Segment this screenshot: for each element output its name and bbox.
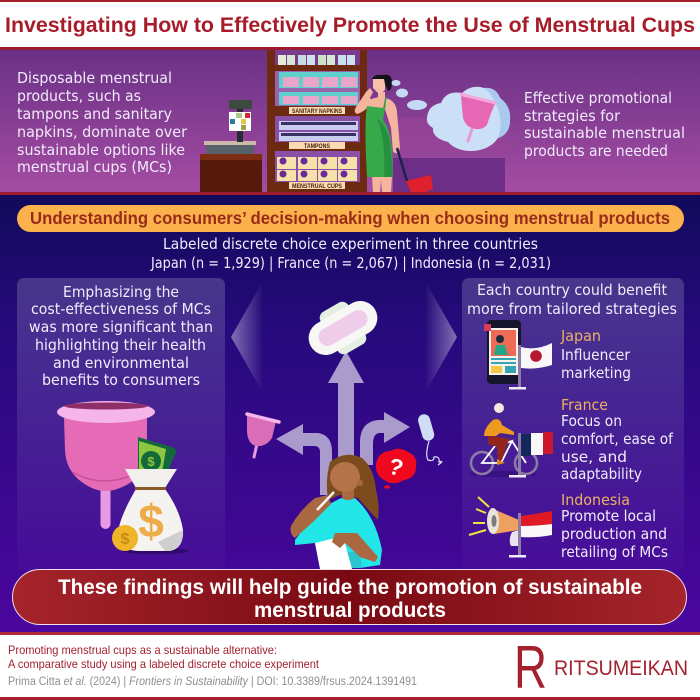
icon: money bag: $ [121,531,130,548]
text: France: comfort, ease of [561,430,674,448]
text: Indonesia [561,491,668,561]
text: Japan: marketing [561,364,631,382]
chart: decision arrows [276,351,410,495]
text: Japan [560,327,631,382]
text: experiment description: Labeled discrete choice experiment in three countries [163,235,538,253]
text: disposable products: sustainable options like [17,141,185,159]
logo: Ritsumeikan: RITSUMEIKAN [554,657,688,680]
text: tailored strategies [467,281,677,318]
arrow: right to tampon [360,412,410,465]
text: disposable products: napkins, dominate over [17,123,188,141]
citation text: A comparative study using a labeled discrete choice experiment [8,657,320,671]
text: cost-effectiveness: highlighting their health [35,336,206,354]
text: experiment description: Japan (n = 1,929) | France (n = 2,067) | Indonesia (n = 2,031) [150,254,551,272]
banner: decision making heading: Understanding consumers’ decision-making when choosing menstrual products [30,208,670,228]
icon: money bag: $ [138,495,164,547]
text: Indonesia: retailing of MCs [561,543,668,561]
citation text [8,643,417,688]
arrow: up to pad [328,351,364,465]
icon: store shelf [267,50,367,192]
text: tailored strategies: more from tailored strategies [467,300,677,318]
callout: conclusion: These findings will help guide the promotion of sustainable [58,576,642,599]
text: cost-effectiveness: benefits to consumers [42,371,200,389]
title bar [0,0,700,50]
icon: large menstrual cup [57,401,155,529]
text: experiment description [150,235,551,272]
text: cost-effectiveness: cost-effectiveness of MCs [31,300,211,318]
text: Japan: Influencer [561,346,631,364]
text: strategies needed: Effective promotional [524,89,672,107]
logo: Ritsumeikan: R [514,634,547,700]
text: disposable products [17,69,188,176]
citation text: Prima Citta et al. (2024) | Frontiers in Sustainability | DOI: 10.3389/frsus.2024.1391491 [8,676,417,688]
title: Investigating How to Effectively Promote the Use of Menstrual Cups [5,14,695,37]
text: France [561,396,674,483]
text: Indonesia: Promote local [561,507,656,525]
text: disposable products: Disposable menstrual [17,69,172,87]
callout: conclusion: menstrual products [254,599,446,622]
text: disposable products: menstrual cups (MCs) [17,158,172,176]
icon: woman shopper [355,75,400,192]
icon: money bag [112,437,188,554]
icon: question bubble [376,449,416,489]
panel: store scene [0,50,700,195]
icon: phone with Japan flag [484,320,552,390]
text: strategies needed: products are needed [524,142,668,160]
icon: megaphone with Indonesia flag [469,497,552,558]
icon: cyclist with France flag [469,403,553,478]
icon: shopping basket [397,148,433,192]
arrow: left to cup [276,424,332,495]
text: Japan: Japan [560,327,601,345]
citation text: Promoting menstrual cups as a sustainable alternative: [8,643,277,657]
text: cost-effectiveness: and environmental [53,354,189,372]
icon: cash register counter [200,100,262,192]
text: tailored strategies: Each country could benefit [477,281,667,299]
text: France: France [561,396,608,414]
icon: small menstrual cup [247,414,279,457]
shelf: sanitary napkins: SANITARY NAPKINS [292,109,342,115]
panel: main dark background [0,195,700,632]
shelf: menstrual cups [275,151,360,190]
decorative arrow: left chevron [231,281,263,393]
text: France: adaptability [561,465,642,483]
store background wall and counter [393,118,505,192]
text: cost-effectiveness [29,283,213,389]
shelf: sanitary napkins [275,71,360,115]
shelf: tampons: TAMPONS [304,144,330,150]
text: Indonesia: Indonesia [561,491,630,509]
icon: money bag: $ [147,454,155,469]
shelf: tampons [275,116,360,150]
icon: question bubble: ? [386,453,406,481]
text: disposable products: products, such as [17,87,141,105]
icon: tampon [417,413,442,465]
panel: right finding [462,278,684,570]
text: strategies needed: sustainable menstrual [524,124,685,142]
text: Indonesia: production and [561,525,667,543]
panel: left finding [17,278,225,570]
text: strategies needed [524,89,685,160]
text: cost-effectiveness: Emphasizing the [63,283,179,301]
logo: Ritsumeikan [514,634,688,700]
footer [0,632,700,700]
shelf: bottles [275,50,360,65]
text: disposable products: tampons and sanitary [17,105,172,123]
icon: woman thinking [290,455,382,569]
decorative arrow: right chevron [425,281,457,393]
text: cost-effectiveness: was more significant than [29,318,213,336]
callout: conclusion [12,570,686,624]
icon: thought bubble with cup [392,80,510,151]
text: France: Focus on [561,412,622,430]
icon: sanitary pad [299,289,387,367]
text: strategies needed: strategies for [524,107,621,125]
shelf: menstrual cups: MENSTRUAL CUPS [292,184,342,190]
text: France: use, and [561,448,627,466]
